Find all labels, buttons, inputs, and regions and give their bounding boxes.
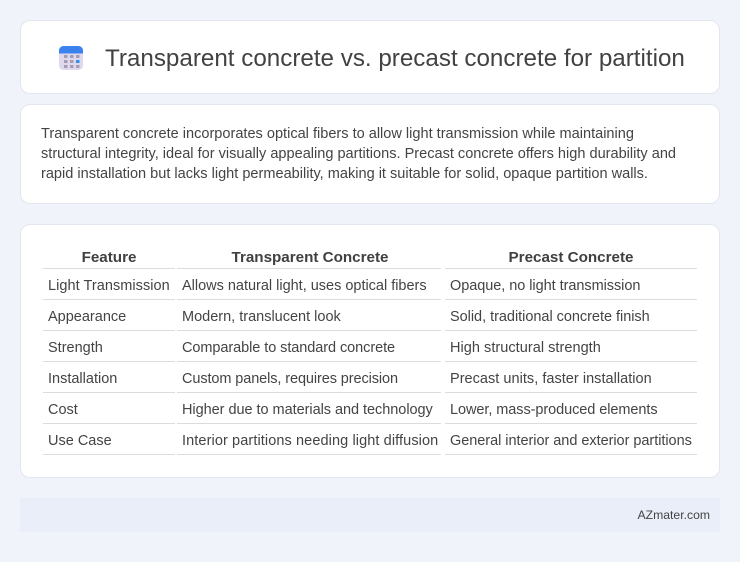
- row: use case: General interior and exterior partitions: [450, 433, 692, 449]
- table header: Transparent Concrete: [232, 249, 388, 266]
- icon: calendar: [59, 46, 83, 70]
- table header: [82, 249, 633, 266]
- row: cost: Lower, mass-produced elements: [450, 402, 658, 418]
- row: cost: Higher due to materials and technology: [182, 402, 433, 418]
- row: strength: [48, 340, 601, 356]
- row: light transmission: Allows natural light, uses optical fibers: [182, 278, 427, 294]
- row: appearance: Appearance: [48, 309, 126, 325]
- row: light transmission: Light Transmission: [48, 278, 170, 294]
- table header: Precast Concrete: [509, 249, 633, 266]
- footer bar: [20, 498, 720, 532]
- row: use case: Use Case: [48, 433, 112, 449]
- title: Transparent concrete vs. precast concrete for partition: [105, 45, 685, 72]
- row: use case: Interior partitions needing light diffusion: [182, 433, 438, 449]
- intro text: rapid installation but lacks light permeability, making it suitable for solid, opaque partition walls.: [41, 166, 648, 182]
- footer brand: AZmater.com: [638, 508, 710, 522]
- intro panel: [20, 104, 720, 204]
- row: strength: Comparable to standard concrete: [182, 340, 395, 356]
- row: strength: High structural strength: [450, 340, 601, 356]
- row: installation: Custom panels, requires precision: [182, 371, 398, 387]
- row: cost: Cost: [48, 402, 78, 418]
- row: installation: Precast units, faster installation: [450, 371, 652, 387]
- row: use case: [48, 433, 692, 449]
- row: light transmission: [48, 278, 640, 294]
- row: installation: [48, 371, 652, 387]
- comparison table panel: [20, 224, 720, 478]
- row: light transmission: Opaque, no light transmission: [450, 278, 640, 294]
- row: appearance: Modern, translucent look: [182, 309, 341, 325]
- row: installation: Installation: [48, 371, 117, 387]
- row: appearance: [48, 309, 650, 325]
- intro text: Transparent concrete incorporates optical fibers to allow light transmission while maintaining: [41, 126, 634, 142]
- header panel: [20, 20, 720, 94]
- intro text: [41, 126, 676, 182]
- intro text: structural integrity, ideal for visually appealing partitions. Precast concrete offers high durability and: [41, 146, 676, 162]
- row: appearance: Solid, traditional concrete finish: [450, 309, 650, 325]
- row: cost: [48, 402, 658, 418]
- row: strength: Strength: [48, 340, 103, 356]
- table header: Feature: [82, 249, 136, 266]
